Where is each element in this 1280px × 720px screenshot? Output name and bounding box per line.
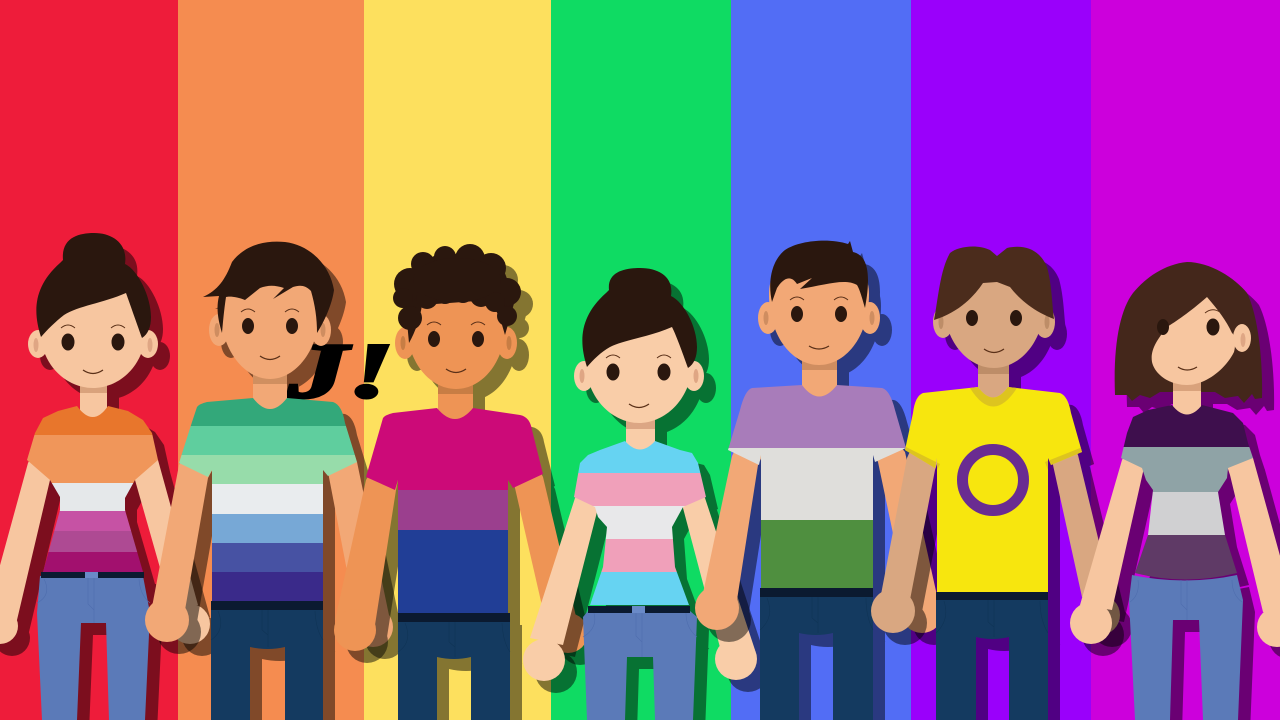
figure 4: transgender flag shirt: [523, 268, 757, 720]
shirt stripes: [565, 435, 715, 606]
belt: [760, 588, 873, 597]
chin shadow: [626, 420, 655, 429]
figure 5: genderqueer flag shirt: [695, 241, 943, 720]
figure 3: bisexual flag shirt: [334, 244, 588, 720]
head: [209, 261, 331, 379]
figure 7: asexual flag shirt: [1070, 262, 1280, 720]
belt: [211, 601, 323, 610]
shirt stripes: [20, 400, 170, 573]
hair: [770, 241, 868, 308]
head: [395, 278, 517, 389]
jeans: [211, 610, 323, 720]
arms and hands: [145, 450, 393, 647]
neck: [253, 370, 287, 415]
figure 2: gay men flag shirt: [145, 242, 393, 720]
curly hair: [393, 244, 521, 343]
head: [1152, 297, 1251, 385]
chin shadow: [438, 384, 473, 394]
chin shadow: [253, 374, 287, 384]
arms and hands: [871, 440, 1120, 635]
head: [574, 268, 704, 423]
jeans: [1129, 575, 1243, 720]
neck: [1173, 380, 1201, 416]
arms and hands: [0, 450, 210, 644]
arms and hands: [695, 440, 943, 633]
jeans: [37, 576, 150, 720]
arms and hands: [523, 485, 757, 681]
chin shadow: [80, 384, 107, 393]
back hair: [1115, 262, 1262, 403]
belt: [936, 592, 1048, 600]
shirt: [900, 380, 1090, 592]
neck: [802, 360, 837, 400]
shirt stripes: [170, 390, 370, 602]
hair: [934, 246, 1054, 320]
figure 1: lesbian flag shirt: [0, 233, 210, 720]
head: [758, 249, 880, 365]
brush lettering partly hidden behind figures: J!: [286, 327, 394, 414]
hair: [203, 242, 334, 333]
arms and hands: [334, 462, 588, 653]
shirt stripes: [360, 400, 550, 614]
intersex ring: [962, 450, 1024, 510]
belt: [41, 572, 144, 578]
chin shadow: [1173, 382, 1201, 391]
neck: [978, 366, 1009, 402]
jeans: [583, 611, 697, 720]
neck: [80, 380, 107, 422]
jeans: [398, 622, 510, 720]
chin shadow: [802, 360, 837, 370]
collar: [970, 387, 1017, 406]
neck: [438, 385, 473, 425]
belt: [398, 613, 510, 622]
chin shadow: [978, 364, 1009, 374]
head: [28, 233, 158, 388]
neck: [626, 418, 655, 454]
head: [933, 257, 1055, 368]
belt: [588, 606, 690, 613]
shirt stripes: [720, 378, 920, 589]
jeans: [936, 600, 1048, 720]
jeans: [760, 597, 873, 720]
figure 6: intersex flag shirt: [871, 246, 1120, 720]
arms and hands: [1070, 445, 1280, 647]
shirt stripes: [1115, 400, 1260, 585]
